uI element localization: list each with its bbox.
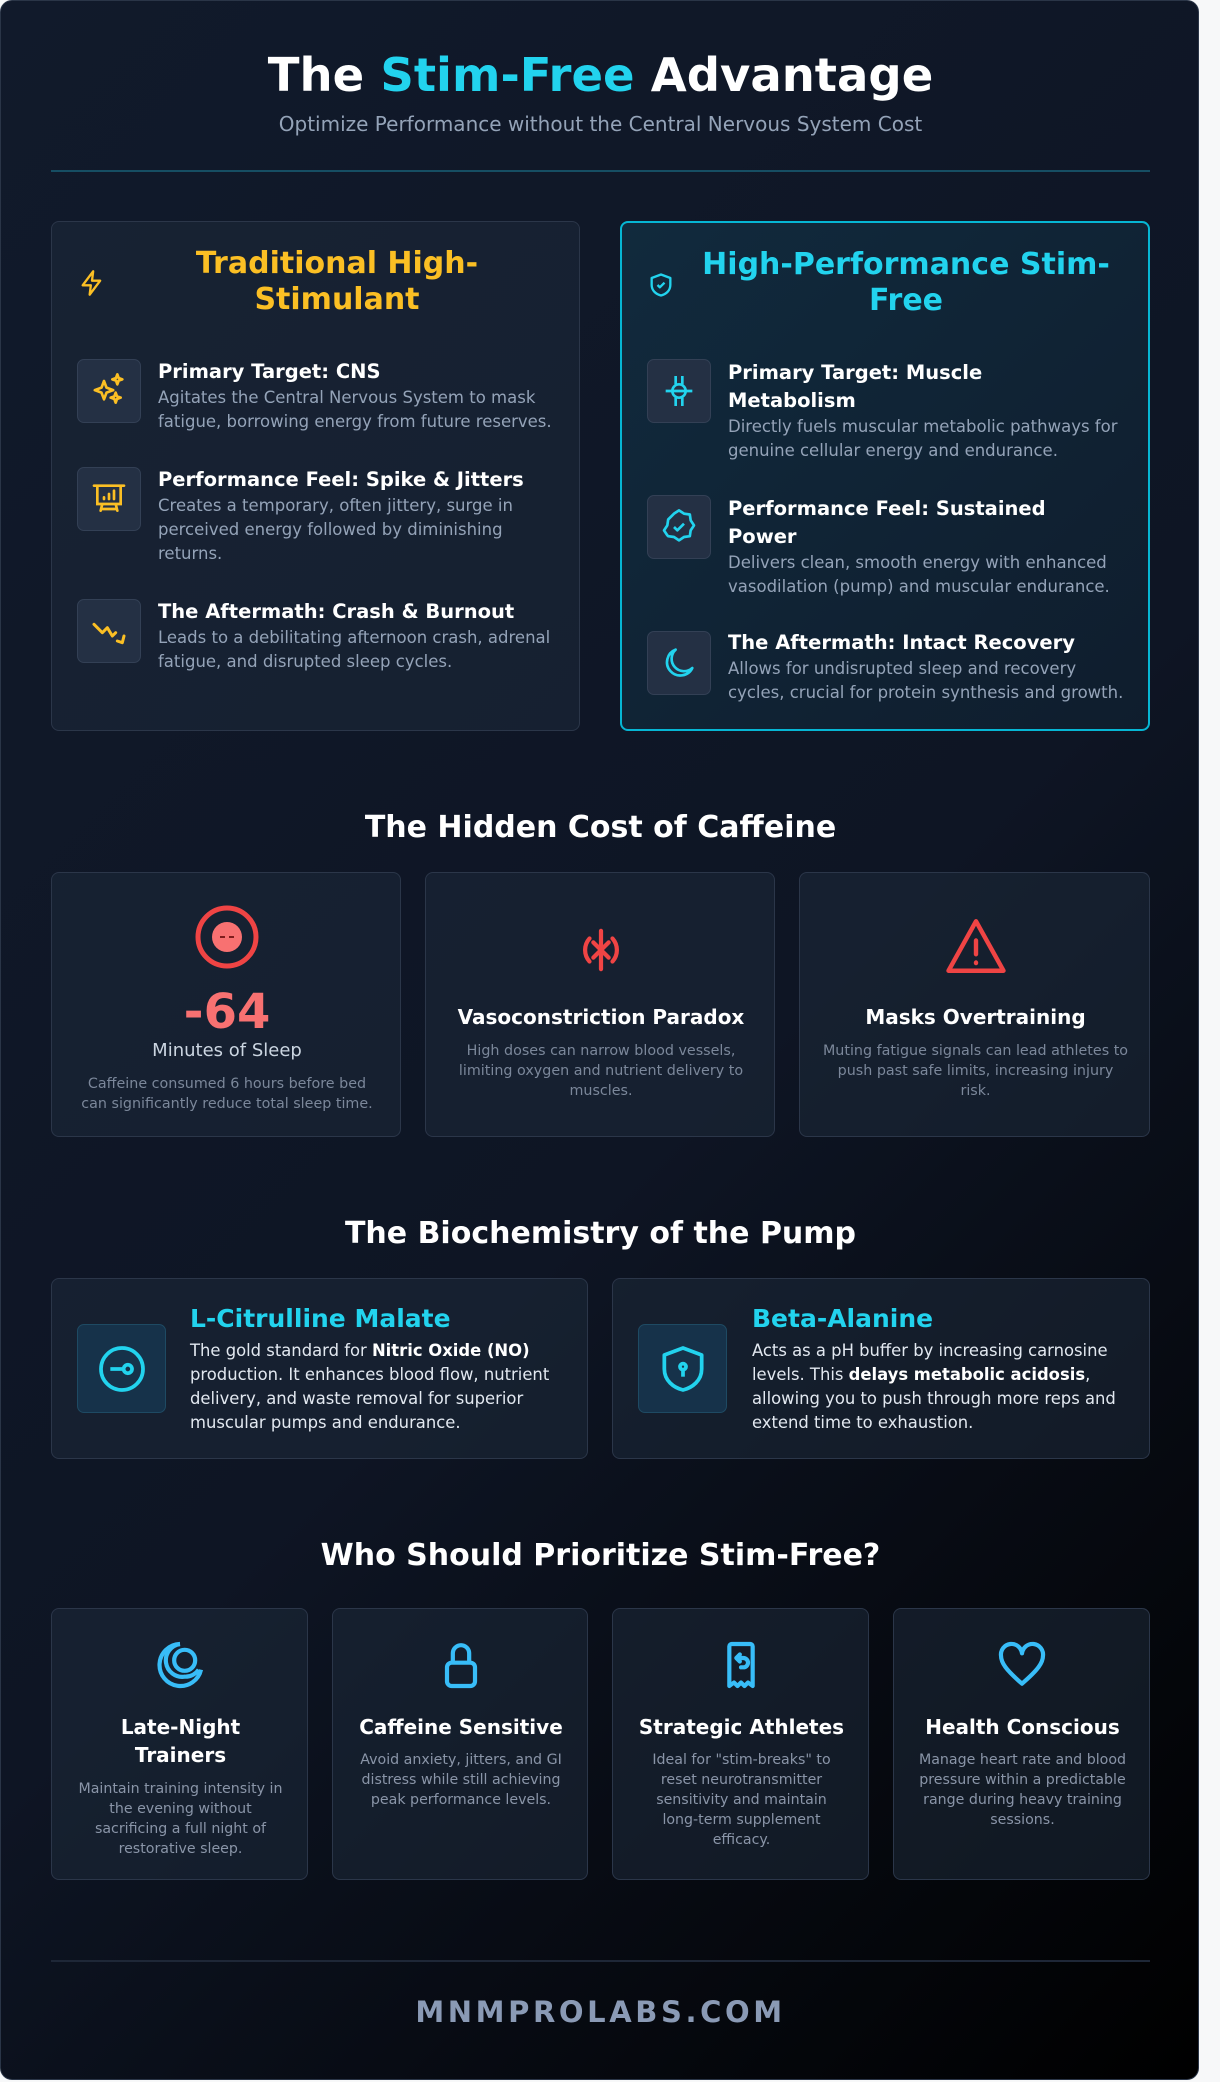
- panel: caffeine sensitive: Avoid anxiety, jitters, and GI distress while still achieving peak performance levels.: [360, 1752, 562, 1808]
- item: sustained power: [647, 495, 1110, 596]
- panel: L-citrulline: The gold standard for Nitric Oxide (NO) production. It enhances blood flow, nutrient delivery, and waste removal for superior muscular pumps and endurance.: [190, 1341, 549, 1432]
- panel: beta-alanine: Acts as a pH buffer by increasing carnosine levels. This delays metabolic acidosis, allowing you to push through more reps and extend time to exhaustion.: [752, 1341, 1116, 1432]
- panel: strategic athletes: Ideal for "stim-breaks" to reset neurotransmitter sensitivity and maintain long-term supplement efficacy.: [652, 1752, 831, 1848]
- subtitle: Optimize Performance without the Central Nervous System Cost: [279, 112, 922, 136]
- panel: health conscious: Health Conscious: [925, 1715, 1120, 1739]
- panel: caffeine sensitive: [332, 1608, 588, 1880]
- footer brand: MNMPROLABS.COM: [415, 1995, 786, 2029]
- panel: masks overtraining: [799, 872, 1150, 1137]
- icon: shield check: [650, 273, 672, 297]
- icon: presentation chart: [77, 467, 141, 531]
- item: muscle metabolism: [647, 359, 1118, 460]
- icon: sparkles: [77, 359, 141, 423]
- title: The Stim-Free Advantage: [268, 48, 933, 102]
- panel: -64 minutes of sleep: Minutes of Sleep: [152, 1040, 302, 1061]
- panel: high-performance stim-free: [620, 221, 1150, 731]
- panel: beta-alanine: [612, 1278, 1150, 1459]
- panel heading: Traditional High-Stimulant: [196, 246, 478, 317]
- item: sustained power: Delivers clean, smooth energy with enhanced vasodilation (pump) and muscular endurance.: [728, 553, 1110, 596]
- icon: key circle: [77, 1324, 166, 1413]
- panel: vasoconstriction: High doses can narrow blood vessels, limiting oxygen and nutrient delivery to muscles.: [459, 1043, 743, 1099]
- item: performance feel: [77, 467, 524, 563]
- item: muscle metabolism: Directly fuels muscular metabolic pathways for genuine cellular energy and endurance.: [728, 417, 1118, 460]
- item: performance feel: Creates a temporary, often jittery, surge in perceived energy followed by diminishing returns.: [158, 496, 513, 563]
- icon: badge check: [647, 495, 711, 559]
- heading: biochemistry: The Biochemistry of the Pump: [345, 1216, 856, 1251]
- item: intact recovery: Allows for undisrupted sleep and recovery cycles, crucial for protein synthesis and growth.: [728, 659, 1123, 702]
- icon: shield keyhole: [638, 1324, 727, 1413]
- item: aftermath: [77, 599, 550, 671]
- panel: late-night trainers: Maintain training intensity in the evening without sacrificing a full night of restorative sleep.: [78, 1781, 282, 1857]
- panel: strategic athletes: [612, 1608, 869, 1880]
- item: muscle metabolism: Primary Target: Muscle Metabolism: [728, 361, 982, 412]
- panel: -64 minutes of sleep: [51, 872, 401, 1137]
- item: primary target CNS: [77, 359, 552, 431]
- item: performance feel: Performance Feel: Spike & Jitters: [158, 468, 524, 491]
- heading: who should prioritize: Who Should Prioritize Stim-Free?: [321, 1538, 880, 1573]
- item: aftermath: The Aftermath: Crash & Burnout: [158, 600, 514, 623]
- panel: caffeine sensitive: Caffeine Sensitive: [359, 1715, 563, 1739]
- icon: constriction: [583, 928, 619, 972]
- panel: masks overtraining: Masks Overtraining: [865, 1005, 1086, 1029]
- panel: L-citrulline: L-Citrulline Malate: [190, 1304, 451, 1333]
- panel: L-citrulline: [51, 1278, 588, 1459]
- item: primary target CNS: Primary Target: CNS: [158, 360, 381, 383]
- icon: warning: [946, 919, 1006, 973]
- heading: hidden cost: The Hidden Cost of Caffeine: [365, 810, 836, 845]
- panel heading: High-Performance Stim-Free: [702, 247, 1110, 318]
- panel: traditional high-stimulant: [51, 221, 580, 731]
- panel: health conscious: [893, 1608, 1150, 1880]
- panel: late-night trainers: [51, 1608, 308, 1880]
- item: sustained power: Performance Feel: Sustained Power: [728, 497, 1046, 548]
- item: intact recovery: [647, 631, 1123, 702]
- icon: receipt return: [727, 1642, 755, 1688]
- panel: beta-alanine: Beta-Alanine: [752, 1304, 933, 1333]
- icon: moon swirl: [157, 1642, 203, 1688]
- icon: lightning: [82, 270, 102, 296]
- panel: -64 minutes of sleep: Caffeine consumed 6 hours before bed can significantly reduce total sleep time.: [81, 1076, 373, 1112]
- icon: trending down: [77, 599, 141, 663]
- icon: lock: [444, 1643, 478, 1688]
- panel: late-night trainers: Late-Night Trainers: [121, 1715, 240, 1767]
- panel: masks overtraining: Muting fatigue signals can lead athletes to push past safe limits, increasing injury risk.: [823, 1043, 1128, 1099]
- item: aftermath: Leads to a debilitating afternoon crash, adrenal fatigue, and disrupted sleep cycles.: [158, 628, 550, 671]
- icon: sleep stop: [196, 906, 258, 968]
- panel: strategic athletes: Strategic Athletes: [639, 1715, 844, 1739]
- item: primary target CNS: Agitates the Central Nervous System to mask fatigue, borrowing energy from future reserves.: [158, 388, 552, 431]
- panel: vasoconstriction: [425, 872, 775, 1137]
- stat -64: -64: [184, 984, 270, 1040]
- panel: health conscious: Manage heart rate and blood pressure within a predictable range during heavy training sessions.: [919, 1752, 1126, 1828]
- item: intact recovery: The Aftermath: Intact Recovery: [728, 631, 1075, 654]
- icon: heart: [998, 1642, 1046, 1686]
- icon: atom: [647, 359, 711, 423]
- panel: vasoconstriction: Vasoconstriction Paradox: [458, 1005, 744, 1029]
- icon: moon: [647, 631, 711, 695]
